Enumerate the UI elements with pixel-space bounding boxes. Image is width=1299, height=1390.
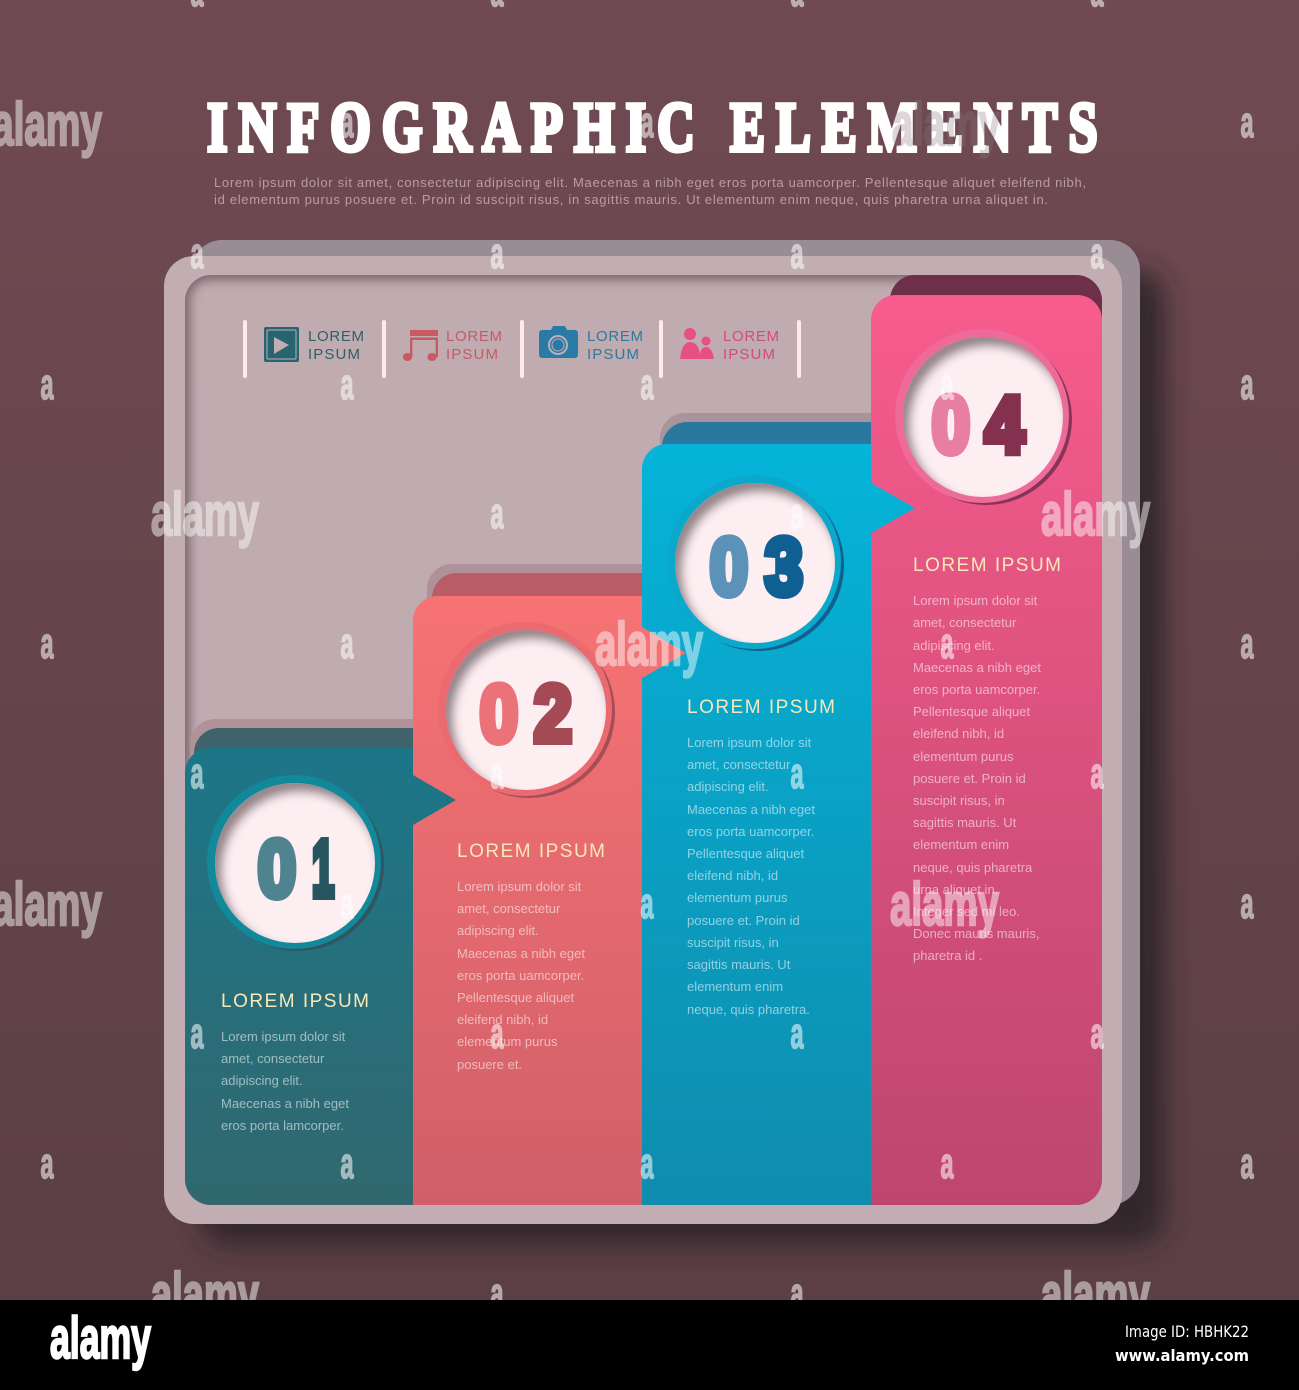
text block: column 02: adipiscing elit.	[457, 923, 539, 938]
watermarks: a	[490, 229, 504, 278]
watermarks: a	[1240, 619, 1254, 668]
subtitle text: Lorem ipsum dolor sit amet, consectetur adipiscing elit. Maecenas a nibh eget eros porta uamcorper. Pellentesque aliquet eleifend nibh,	[214, 175, 1086, 190]
label: music	[446, 328, 502, 363]
watermarks: a	[940, 1139, 954, 1188]
footer url: www.alamy.com	[1115, 1346, 1249, 1365]
watermarks: a	[1090, 1009, 1104, 1058]
watermarks: a	[190, 1009, 204, 1058]
text block: column 03	[687, 697, 835, 1017]
text block: column 04: pharetra id .	[913, 948, 982, 963]
icon: play	[264, 327, 299, 362]
icon: camera	[539, 326, 578, 358]
watermarks: alamy	[151, 481, 259, 548]
badge 02: 2	[534, 669, 572, 758]
label: camera: LOREM	[587, 328, 643, 345]
text block: column 03: Lorem ipsum dolor sit	[687, 735, 812, 750]
text block: column 02: Pellentesque aliquet	[457, 990, 574, 1005]
text block: column 03: elementum purus	[687, 890, 788, 905]
watermarks: a	[1240, 360, 1254, 409]
panel: frame	[164, 240, 1165, 1245]
footer logo: alamy	[50, 1306, 151, 1371]
watermarks: a	[790, 229, 804, 278]
watermarks: a	[790, 489, 804, 538]
text block: column 01: Lorem ipsum dolor sit	[221, 1029, 346, 1044]
watermarks: a	[40, 619, 54, 668]
title: INFOGRAPHIC ELEMENTS	[207, 89, 1097, 166]
text block: column 02: posuere et.	[457, 1057, 522, 1072]
text block: column 04: eleifend nibh, id	[913, 726, 1004, 741]
watermarks: a	[340, 360, 354, 409]
text block: column 02: Maecenas a nibh eget	[457, 946, 585, 961]
column 02	[413, 564, 686, 1205]
badge 02: 0	[480, 669, 518, 758]
badge 03: 0	[710, 522, 748, 611]
text block: column 04: LOREM IPSUM	[913, 555, 1061, 576]
label: play	[308, 328, 364, 363]
text block: column 04: amet, consectetur	[913, 615, 1017, 630]
text block: column 01: Maecenas a nibh eget	[221, 1096, 349, 1111]
subtitle text	[214, 175, 1086, 207]
text block: column 04: Pellentesque aliquet	[913, 704, 1030, 719]
watermarks: a	[790, 749, 804, 798]
watermarks: alamy	[892, 91, 1000, 158]
text block: column 01: amet, consectetur	[221, 1051, 325, 1066]
badge 01: 0	[258, 824, 296, 913]
watermarks: a	[640, 98, 654, 147]
text block: column 04: neque, quis pharetra	[913, 860, 1033, 875]
text block: column 03: eleifend nibh, id	[687, 868, 778, 883]
watermarks: a	[490, 1009, 504, 1058]
footer image id: Image ID: HBHK22	[1125, 1322, 1249, 1341]
badge 01	[207, 775, 389, 959]
watermarks: alamy	[1041, 1261, 1150, 1328]
watermarks: alamy	[595, 611, 703, 678]
text block: column 03: suscipit risus, in	[687, 935, 779, 950]
watermarks: a	[790, 1269, 804, 1318]
watermarks: a	[340, 98, 354, 147]
icon: people	[680, 328, 714, 359]
text block: column 04: Integer sed mi leo.	[913, 904, 1020, 919]
watermarks: a	[490, 1269, 504, 1318]
text block: column 01	[221, 991, 369, 1133]
badge 04: 4	[985, 380, 1024, 469]
watermarks: a	[640, 879, 654, 928]
text block: column 04: Maecenas a nibh eget	[913, 660, 1041, 675]
text block: column 01: eros porta lamcorper.	[221, 1118, 344, 1133]
text block: column 02: eros porta uamcorper.	[457, 968, 584, 983]
label: people: IPSUM	[723, 346, 775, 363]
panel: column bars	[185, 275, 1102, 1205]
icon: music note	[403, 330, 438, 361]
label: play: IPSUM	[308, 346, 360, 363]
label: people: LOREM	[723, 328, 779, 345]
watermarks: a	[640, 1139, 654, 1188]
text block: column 04: elementum purus	[913, 749, 1014, 764]
footer bar	[0, 1300, 1299, 1390]
text block: column 03: amet, consectetur	[687, 757, 791, 772]
text block: column 03: posuere et. Proin id	[687, 913, 800, 928]
text block: column 03: neque, quis pharetra.	[687, 1002, 810, 1017]
watermarks: a	[40, 1139, 54, 1188]
text block: column 02	[457, 841, 605, 1072]
watermarks: a	[490, 489, 504, 538]
text block: column 02: eleifend nibh, id	[457, 1012, 548, 1027]
icon row separators	[243, 320, 801, 378]
text block: column 02: LOREM IPSUM	[457, 841, 605, 862]
label: play: LOREM	[308, 328, 364, 345]
text block: column 01: LOREM IPSUM	[221, 991, 369, 1012]
watermarks: a	[490, 749, 504, 798]
watermarks: a	[1240, 1139, 1254, 1188]
watermarks: a	[1240, 879, 1254, 928]
column 04	[871, 275, 1102, 1205]
text block: column 03: Pellentesque aliquet	[687, 846, 804, 861]
watermarks: a	[1240, 98, 1254, 147]
text block: column 04: elementum enim	[913, 837, 1009, 852]
text block: column 02: Lorem ipsum dolor sit	[457, 879, 582, 894]
label: people	[723, 328, 779, 363]
badge 03	[674, 475, 844, 651]
text block: column 04: sagittis mauris. Ut	[913, 815, 1017, 830]
watermarks: a	[340, 1139, 354, 1188]
text block: column 04: Lorem ipsum dolor sit	[913, 593, 1038, 608]
text block: column 02: amet, consectetur	[457, 901, 561, 916]
watermarks: alamy	[890, 871, 999, 938]
text block: column 04: posuere et. Proin id	[913, 771, 1026, 786]
text block: column 03: adipiscing elit.	[687, 779, 769, 794]
watermarks: alamy	[151, 1261, 259, 1328]
label: music: IPSUM	[446, 346, 498, 363]
text block: column 04: urna aliquet in.	[913, 882, 998, 897]
watermarks: a	[790, 1009, 804, 1058]
text block: column 01: adipiscing elit.	[221, 1073, 303, 1088]
watermarks: a	[940, 360, 954, 409]
watermarks: a	[190, 749, 204, 798]
column 03	[642, 413, 915, 1205]
label: camera: IPSUM	[587, 346, 639, 363]
text block: column 03: LOREM IPSUM	[687, 697, 835, 718]
watermarks: a	[1090, 749, 1104, 798]
watermarks: a	[340, 879, 354, 928]
watermarks: a	[40, 360, 54, 409]
label: music: LOREM	[446, 328, 502, 345]
subtitle text: id elementum purus posuere et. Proin id suscipit risus, in sagittis mauris. Ut elementum enim neque, quis pharetra urna aliquet in.	[214, 192, 1048, 207]
text block: column 03: eros porta uamcorper.	[687, 824, 814, 839]
text block: column 03: sagittis mauris. Ut	[687, 957, 791, 972]
column 01	[185, 719, 456, 1205]
badge 03: 3	[765, 522, 803, 611]
text block: column 04: eros porta uamcorper.	[913, 682, 1040, 697]
text block: column 04	[913, 555, 1061, 963]
watermarks: a	[640, 360, 654, 409]
text block: column 04: adipiscing elit.	[913, 638, 995, 653]
badge 04: 0	[932, 380, 970, 469]
watermarks: a	[340, 619, 354, 668]
watermarks: alamy	[1041, 481, 1150, 548]
label: camera	[587, 328, 643, 363]
badge 02	[446, 622, 615, 798]
watermarks: a	[1090, 229, 1104, 278]
badge 04	[895, 329, 1077, 513]
text block: column 04: suscipit risus, in	[913, 793, 1005, 808]
text block: column 02: elementum purus	[457, 1034, 558, 1049]
text block: column 03: elementum enim	[687, 979, 783, 994]
badge 01: 1	[312, 825, 334, 914]
text block: column 03: Maecenas a nibh eget	[687, 802, 815, 817]
watermarks: a	[940, 619, 954, 668]
watermarks: a	[190, 229, 204, 278]
text block: column 04: Donec mauris mauris,	[913, 926, 1039, 941]
